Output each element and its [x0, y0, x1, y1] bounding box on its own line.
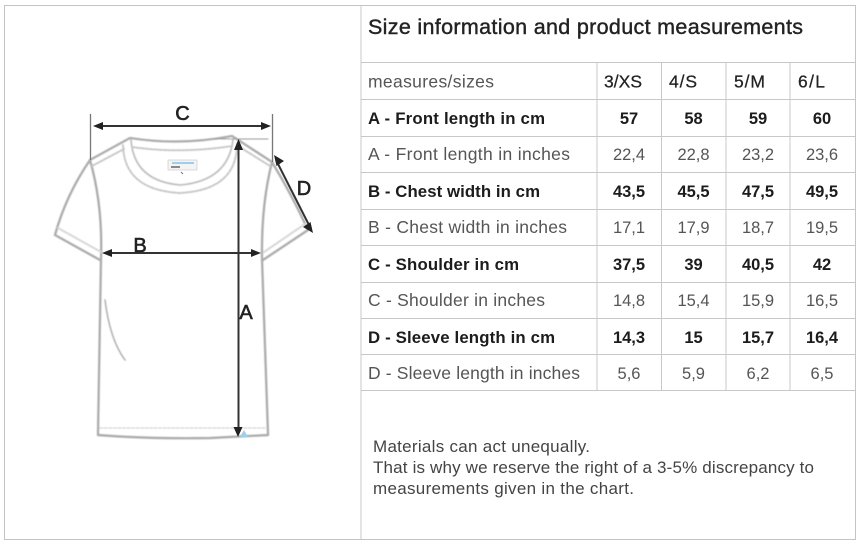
table header row: measures/sizes: [368, 72, 494, 92]
row: B cm: 47,5: [742, 183, 774, 201]
table header row: 4/S: [669, 72, 697, 92]
row: D cm: 16,4: [806, 329, 839, 347]
label A: A: [239, 302, 253, 324]
row: A cm: 60: [813, 110, 831, 128]
disclaimer note: [373, 437, 814, 498]
arrow A: front length: [234, 139, 243, 437]
row: C cm: 37,5: [613, 256, 645, 274]
row: D inches: 6,5: [811, 365, 833, 383]
disclaimer note: Materials can act unequally.: [373, 437, 590, 456]
row: C inches: 15,9: [742, 292, 774, 310]
row: C inches: C - Shoulder in inches: [368, 290, 545, 310]
row: C cm: 40,5: [742, 256, 774, 274]
arrow B: chest width: [102, 249, 261, 257]
row: C cm: [368, 255, 831, 274]
row: C inches: 14,8: [613, 292, 645, 310]
row: D inches: [368, 363, 833, 383]
disclaimer note: That is why we reserve the right of a 3-5% discrepancy to: [373, 458, 814, 477]
arrow C: shoulder width: [90, 114, 272, 162]
row: D cm: [368, 328, 839, 347]
row: B inches: 17,9: [677, 219, 710, 237]
row: A inches: [368, 144, 838, 164]
row: C cm: C - Shoulder in cm: [368, 255, 519, 274]
row: C inches: 16,5: [806, 292, 838, 310]
panel: t-shirt diagram: [55, 103, 313, 438]
row: B inches: 19,5: [806, 219, 838, 237]
label D: D: [297, 178, 311, 200]
row: B inches: 17,1: [613, 219, 645, 237]
row: C cm: 39: [684, 256, 703, 274]
row: D cm: 15,7: [742, 329, 774, 347]
row: A inches: 23,6: [806, 146, 838, 164]
row: A cm: 57: [620, 110, 638, 128]
row: B cm: 45,5: [677, 183, 710, 201]
title: Size information and product measurements: [368, 15, 803, 39]
table header row: 3/XS: [604, 72, 642, 92]
row: B inches: [368, 217, 838, 237]
t-shirt outline: [55, 136, 308, 438]
arrow D: sleeve length: [274, 155, 313, 233]
table header row: 6/L: [798, 72, 825, 92]
row: A cm: 58: [684, 110, 703, 128]
table header row: 5/M: [734, 72, 765, 92]
row: C cm: 42: [813, 256, 831, 274]
row: C inches: [368, 290, 838, 310]
label C: C: [175, 103, 190, 125]
disclaimer note: measurements given in the chart.: [373, 479, 634, 498]
row: D cm: 15: [684, 329, 703, 347]
row: A inches: 22,8: [677, 146, 710, 164]
table: [368, 72, 839, 383]
row: A cm: 59: [749, 110, 767, 128]
row: D inches: D - Sleeve length in inches: [368, 363, 580, 383]
row: B cm: 49,5: [806, 183, 838, 201]
row: A inches: 23,2: [742, 146, 774, 164]
row: D inches: 5,9: [682, 365, 705, 383]
row: C inches: 15,4: [677, 292, 710, 310]
row: D cm: D - Sleeve length in cm: [368, 328, 555, 347]
table header row: [368, 72, 825, 92]
row: B cm: B - Chest width in cm: [368, 182, 540, 201]
row: A inches: A - Front length in inches: [368, 144, 570, 164]
icon: hem tag: [240, 430, 248, 437]
row: D inches: 6,2: [747, 365, 769, 383]
row: A cm: [368, 109, 831, 128]
row: B cm: 43,5: [613, 183, 645, 201]
label B: B: [133, 235, 147, 257]
row: A inches: 22,4: [613, 146, 645, 164]
row: D inches: 5,6: [618, 365, 640, 383]
row: B inches: 18,7: [742, 219, 774, 237]
icon: neck label: [168, 160, 197, 174]
row: B cm: [368, 182, 838, 201]
row: A cm: A - Front length in cm: [368, 109, 545, 128]
row: D cm: 14,3: [613, 329, 645, 347]
row: B inches: B - Chest width in inches: [368, 217, 567, 237]
